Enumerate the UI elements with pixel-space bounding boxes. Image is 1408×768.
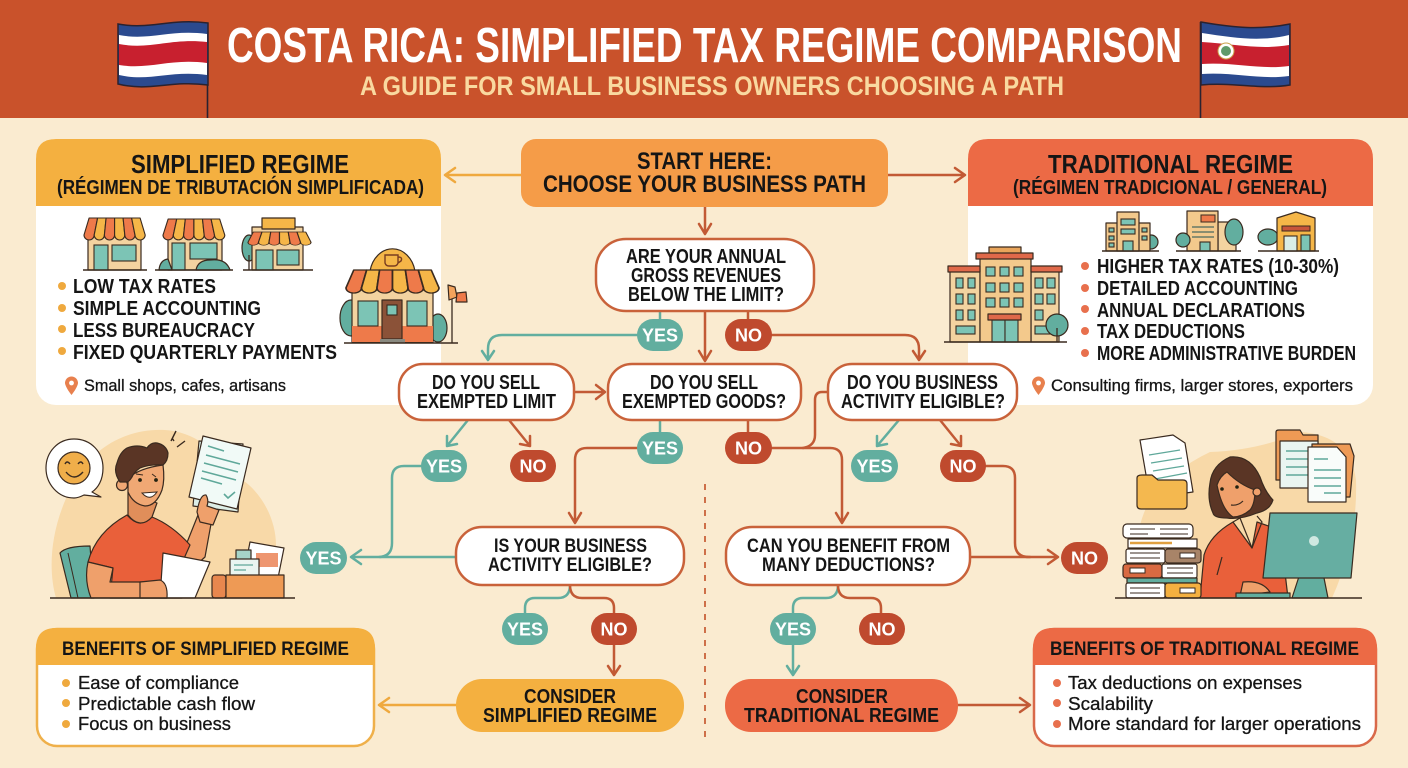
icon: office with trees	[1176, 211, 1243, 251]
simplified benefits list: Focus on business	[78, 713, 231, 734]
panel: benefits of traditional regime	[1033, 628, 1377, 746]
start box: CHOOSE YOUR BUSINESS PATH	[543, 171, 866, 198]
start box	[521, 139, 888, 207]
decision: exempted limit: DO YOU SELL	[432, 372, 540, 394]
decision: exempted goods	[608, 364, 801, 420]
traditional regime bullet list: ANNUAL DECLARATIONS	[1097, 299, 1305, 322]
icon: large office building	[944, 247, 1068, 342]
illustration: happy small business owner	[46, 430, 295, 598]
traditional regime bullet list: TAX DEDUCTIONS	[1097, 320, 1245, 343]
decision: annual gross revenues: BELOW THE LIMIT?	[628, 284, 784, 306]
yes and no pills: YES	[642, 438, 678, 458]
traditional regime bullet list: DETAILED ACCOUNTING	[1097, 277, 1298, 300]
outcome: consider simplified regime	[456, 679, 684, 732]
icon: large cafe shop	[340, 249, 467, 343]
header band	[0, 0, 1408, 118]
heading: simplified regime: SIMPLIFIED REGIME	[131, 149, 349, 179]
examples: simplified regime: Small shops, cafes, artisans	[84, 376, 286, 395]
decision: many deductions	[726, 527, 970, 585]
decision: business activity	[828, 364, 1017, 420]
examples: traditional regime: Consulting firms, larger stores, exporters	[1051, 376, 1353, 395]
yes and no pills: NO	[735, 438, 762, 458]
sub-heading: simplified regime Spanish name: (RÉGIMEN DE TRIBUTACIÓN SIMPLIFICADA)	[57, 175, 424, 199]
outcome: consider traditional regime: CONSIDER	[796, 686, 888, 708]
decision: business activity: DO YOU BUSINESS	[847, 372, 998, 394]
decision: many deductions: CAN YOU BENEFIT FROM	[747, 536, 950, 557]
icon: small shop three	[242, 218, 313, 270]
icon: right Costa Rica flag	[1200, 22, 1290, 118]
icon: left Costa Rica flag	[118, 22, 208, 118]
outcome: consider traditional regime	[725, 679, 958, 732]
illustration: busy accountant at computer	[1115, 430, 1362, 598]
outcome: consider traditional regime: TRADITIONAL REGIME	[744, 705, 939, 727]
icon: small shop one	[83, 218, 147, 270]
heading: benefits of simplified regime: BENEFITS OF SIMPLIFIED REGIME	[62, 638, 349, 660]
yes and no pills: NO	[868, 620, 896, 640]
yes and no pills: NO	[600, 620, 628, 640]
simplified benefits list: Predictable cash flow	[78, 693, 256, 714]
decision: is business activity eligible: ACTIVITY ELIGIBLE?	[488, 555, 652, 576]
simplified benefits list: Ease of compliance	[78, 672, 239, 693]
decision: is business activity eligible: IS YOUR BUSINESS	[494, 536, 647, 557]
start box: START HERE:	[637, 148, 772, 175]
panel: simplified regime	[36, 139, 467, 405]
outcome: consider simplified regime: CONSIDER	[524, 686, 616, 708]
traditional benefits list: More standard for larger operations	[1068, 713, 1361, 734]
decision: exempted goods: EXEMPTED GOODS?	[622, 391, 786, 413]
yes and no pills: NO	[735, 326, 762, 346]
simplified benefits list	[62, 672, 256, 734]
decision: annual gross revenues	[596, 239, 814, 311]
yes and no pills: YES	[426, 456, 462, 476]
yes and no pills: YES	[856, 456, 893, 476]
decision: annual gross revenues: ARE YOUR ANNUAL	[626, 246, 786, 268]
traditional benefits list	[1053, 672, 1361, 734]
outcome: consider simplified regime: SIMPLIFIED REGIME	[483, 705, 657, 727]
traditional benefits list: Tax deductions on expenses	[1068, 672, 1302, 693]
yes and no pills: YES	[305, 548, 342, 568]
yes and no pills: NO	[1071, 548, 1098, 568]
simplified regime bullet list: FIXED QUARTERLY PAYMENTS	[73, 341, 337, 364]
traditional regime bullet list: HIGHER TAX RATES (10-30%)	[1097, 255, 1339, 278]
decision: business activity: ACTIVITY ELIGIBLE?	[841, 391, 1005, 413]
traditional benefits list: Scalability	[1068, 693, 1154, 714]
yes and no pills: NO	[950, 456, 976, 476]
yes and no pills: YES	[775, 620, 811, 640]
decision: many deductions: MANY DEDUCTIONS?	[762, 555, 935, 576]
yes and no pills: YES	[507, 620, 543, 640]
decision: exempted limit: EXEMPTED LIMIT	[417, 391, 556, 413]
connector lines and arrows	[351, 168, 1058, 737]
simplified regime bullet list: SIMPLE ACCOUNTING	[73, 297, 261, 320]
traditional regime bullet list	[1081, 255, 1356, 365]
decision: is business activity eligible	[456, 527, 684, 585]
heading: benefits of traditional regime: BENEFITS OF TRADITIONAL REGIME	[1050, 638, 1359, 660]
icon: small shop two	[155, 219, 233, 270]
decision: annual gross revenues: GROSS REVENUES	[631, 265, 781, 287]
yes and no pills: NO	[520, 456, 546, 476]
yes and no pills: YES	[642, 326, 678, 346]
simplified regime bullet list: LESS BUREAUCRACY	[73, 319, 255, 342]
icon: warehouse	[1258, 212, 1319, 251]
icon: small office block	[1102, 212, 1159, 251]
panel: benefits of simplified regime	[36, 628, 375, 746]
decision: exempted goods: DO YOU SELL	[650, 372, 758, 394]
panel: traditional regime	[944, 139, 1373, 405]
subtitle: A GUIDE FOR SMALL BUSINESS OWNERS CHOOSING A PATH	[360, 71, 1064, 101]
sub-heading: traditional regime Spanish name: (RÉGIMEN TRADICIONAL / GENERAL)	[1013, 176, 1327, 199]
heading: traditional regime: TRADITIONAL REGIME	[1048, 149, 1293, 179]
yes and no pills	[300, 319, 1108, 645]
simplified regime bullet list: LOW TAX RATES	[73, 275, 216, 298]
decision: exempted limit	[399, 364, 574, 420]
simplified regime bullet list	[58, 275, 337, 364]
